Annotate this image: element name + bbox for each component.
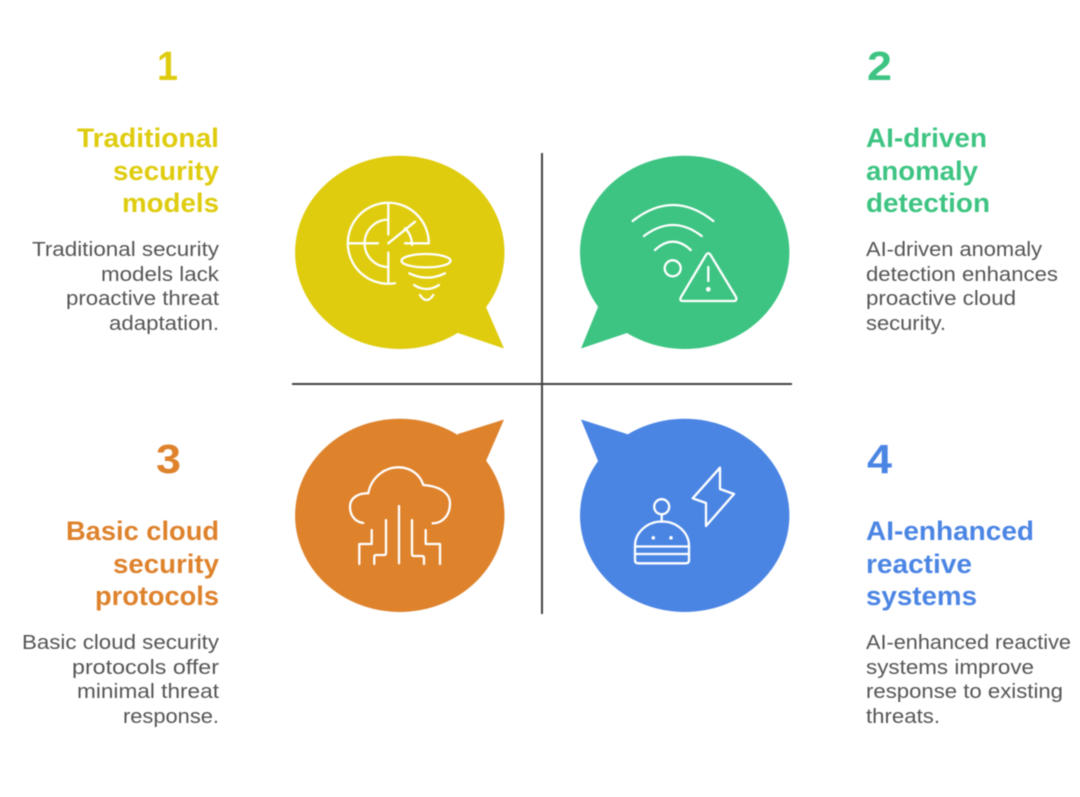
text block 2 [866, 43, 1058, 335]
text block 3: Basic cloud security [22, 631, 220, 654]
text block 3: protocols [95, 581, 219, 611]
text block 3 [22, 436, 220, 728]
text block 4: reactive [866, 549, 972, 579]
icon: radar and tornado [348, 203, 450, 300]
panel: bubble 1 yellow [295, 156, 504, 349]
text block 3: 3 [156, 436, 181, 482]
icon: robot and lightning bolt [635, 468, 734, 563]
text block 1: Traditional security [32, 238, 220, 261]
text block 2: AI-driven [866, 123, 987, 153]
text block 3: protocols offer [72, 656, 219, 679]
text block 4: systems improve [866, 656, 1034, 679]
text block 2: security. [866, 312, 946, 335]
text block 4: 4 [867, 436, 892, 482]
text block 1 [32, 43, 220, 335]
text block 2: detection enhances [866, 263, 1058, 286]
text block 2: 2 [867, 43, 892, 89]
text block 2: proactive cloud [866, 287, 1016, 310]
text block 4 [866, 436, 1071, 728]
text block 2: anomaly [866, 156, 978, 186]
text block 2: detection [866, 188, 990, 218]
text block 1: models lack [101, 263, 220, 286]
icon: cloud with circuits [350, 467, 450, 564]
text block 4: threats. [866, 705, 940, 728]
text block 3: response. [123, 705, 219, 728]
text block 4: AI-enhanced [866, 516, 1034, 546]
panel: bubble 3 orange [295, 419, 504, 612]
text block 2: AI-driven anomaly [866, 238, 1043, 261]
panel: bubble 4 blue [580, 419, 789, 612]
text block 1: adaptation. [109, 312, 219, 335]
text block 1: models [122, 188, 219, 218]
icon: wifi and warning triangle [633, 205, 736, 301]
text block 1: proactive threat [66, 287, 219, 310]
text block 3: minimal threat [77, 680, 219, 703]
text block 3: Basic cloud [66, 516, 219, 546]
text block 1: Traditional [77, 123, 219, 153]
text block 3: security [113, 549, 219, 579]
text block 1: 1 [157, 43, 178, 89]
text block 4: AI-enhanced reactive [866, 631, 1071, 654]
text block 1: security [113, 156, 219, 186]
text block 4: response to existing [866, 680, 1063, 703]
text block 4: systems [866, 581, 977, 611]
panel: bubble 2 green [580, 156, 789, 349]
